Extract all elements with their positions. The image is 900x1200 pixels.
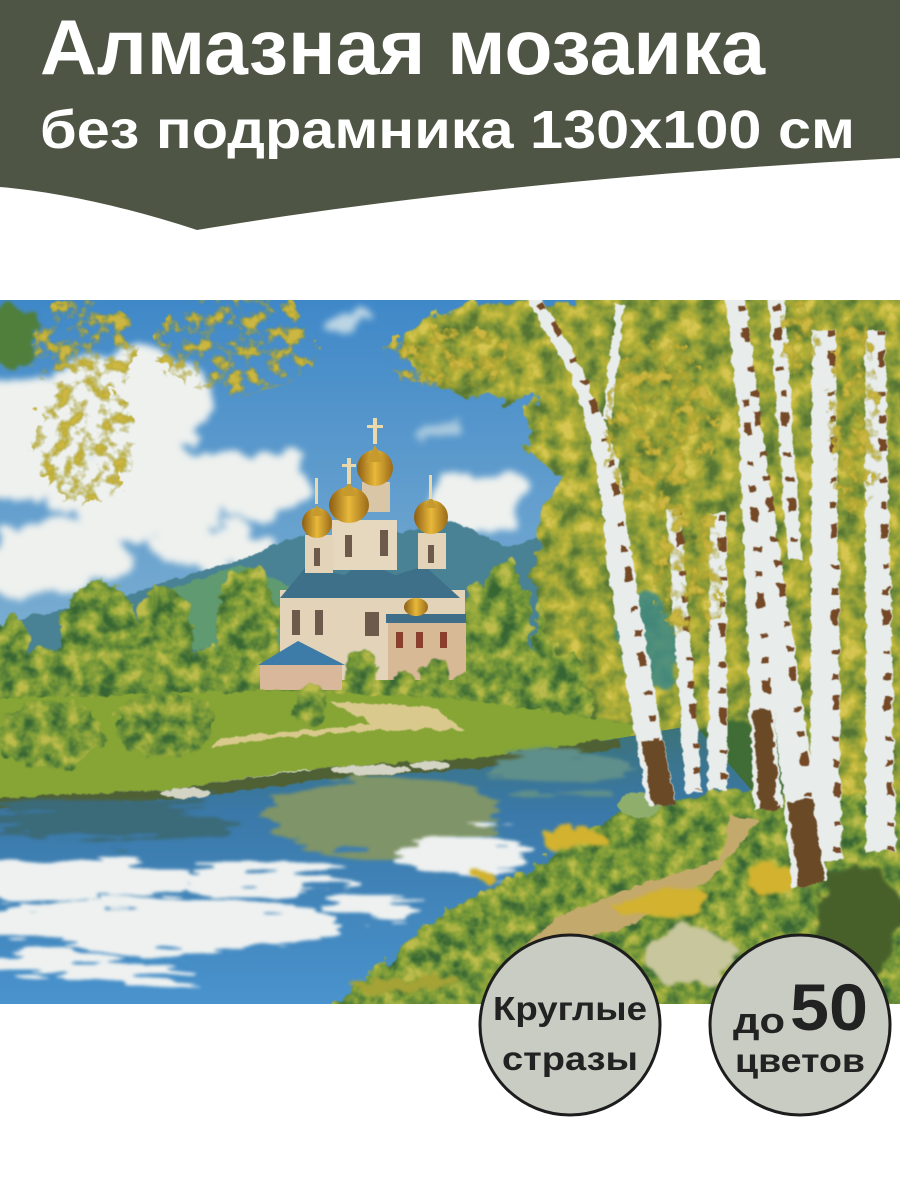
meadow bank xyxy=(0,690,640,802)
badge: round rhinestones: стразы xyxy=(502,1040,638,1077)
badge: round rhinestones: Круглые xyxy=(493,990,647,1027)
shore line xyxy=(0,738,620,812)
header banner xyxy=(0,0,900,230)
church xyxy=(258,418,466,690)
badge: up to 50 colours: до xyxy=(733,1000,785,1041)
far green gap behind birches xyxy=(618,592,682,688)
foliage over the birches xyxy=(605,300,880,640)
clouds xyxy=(0,312,523,594)
bushes on meadow xyxy=(0,687,325,770)
background tree line xyxy=(0,562,620,720)
mountains xyxy=(18,520,544,658)
foreground foliage on left xyxy=(33,293,515,507)
sky xyxy=(0,300,578,628)
foreground bushes near church xyxy=(344,648,466,680)
badge: up to 50 colours xyxy=(710,935,890,1115)
right bank xyxy=(330,788,900,1004)
badge: up to 50 colours: цветов xyxy=(735,1042,865,1079)
windows xyxy=(292,530,434,636)
meadow path xyxy=(210,702,465,748)
right wing xyxy=(388,622,466,680)
chapel xyxy=(260,664,342,690)
painting: church by the lake with birches xyxy=(0,270,900,1050)
title: Алмазная мозаика xyxy=(40,3,766,91)
flowers xyxy=(345,827,790,993)
badge: up to 50 colours: 50 xyxy=(790,970,868,1044)
badge: round rhinestones xyxy=(480,935,660,1115)
lake reflection xyxy=(0,752,630,855)
lake clouds xyxy=(0,833,530,983)
shore rocks xyxy=(160,761,450,798)
dirt path xyxy=(525,815,760,945)
right forest backdrop xyxy=(405,270,900,830)
domes xyxy=(357,450,393,486)
main building xyxy=(280,590,465,680)
birch trunks xyxy=(525,295,896,888)
lake xyxy=(0,725,760,1010)
subtitle: без подрамника 130х100 см xyxy=(40,100,855,160)
